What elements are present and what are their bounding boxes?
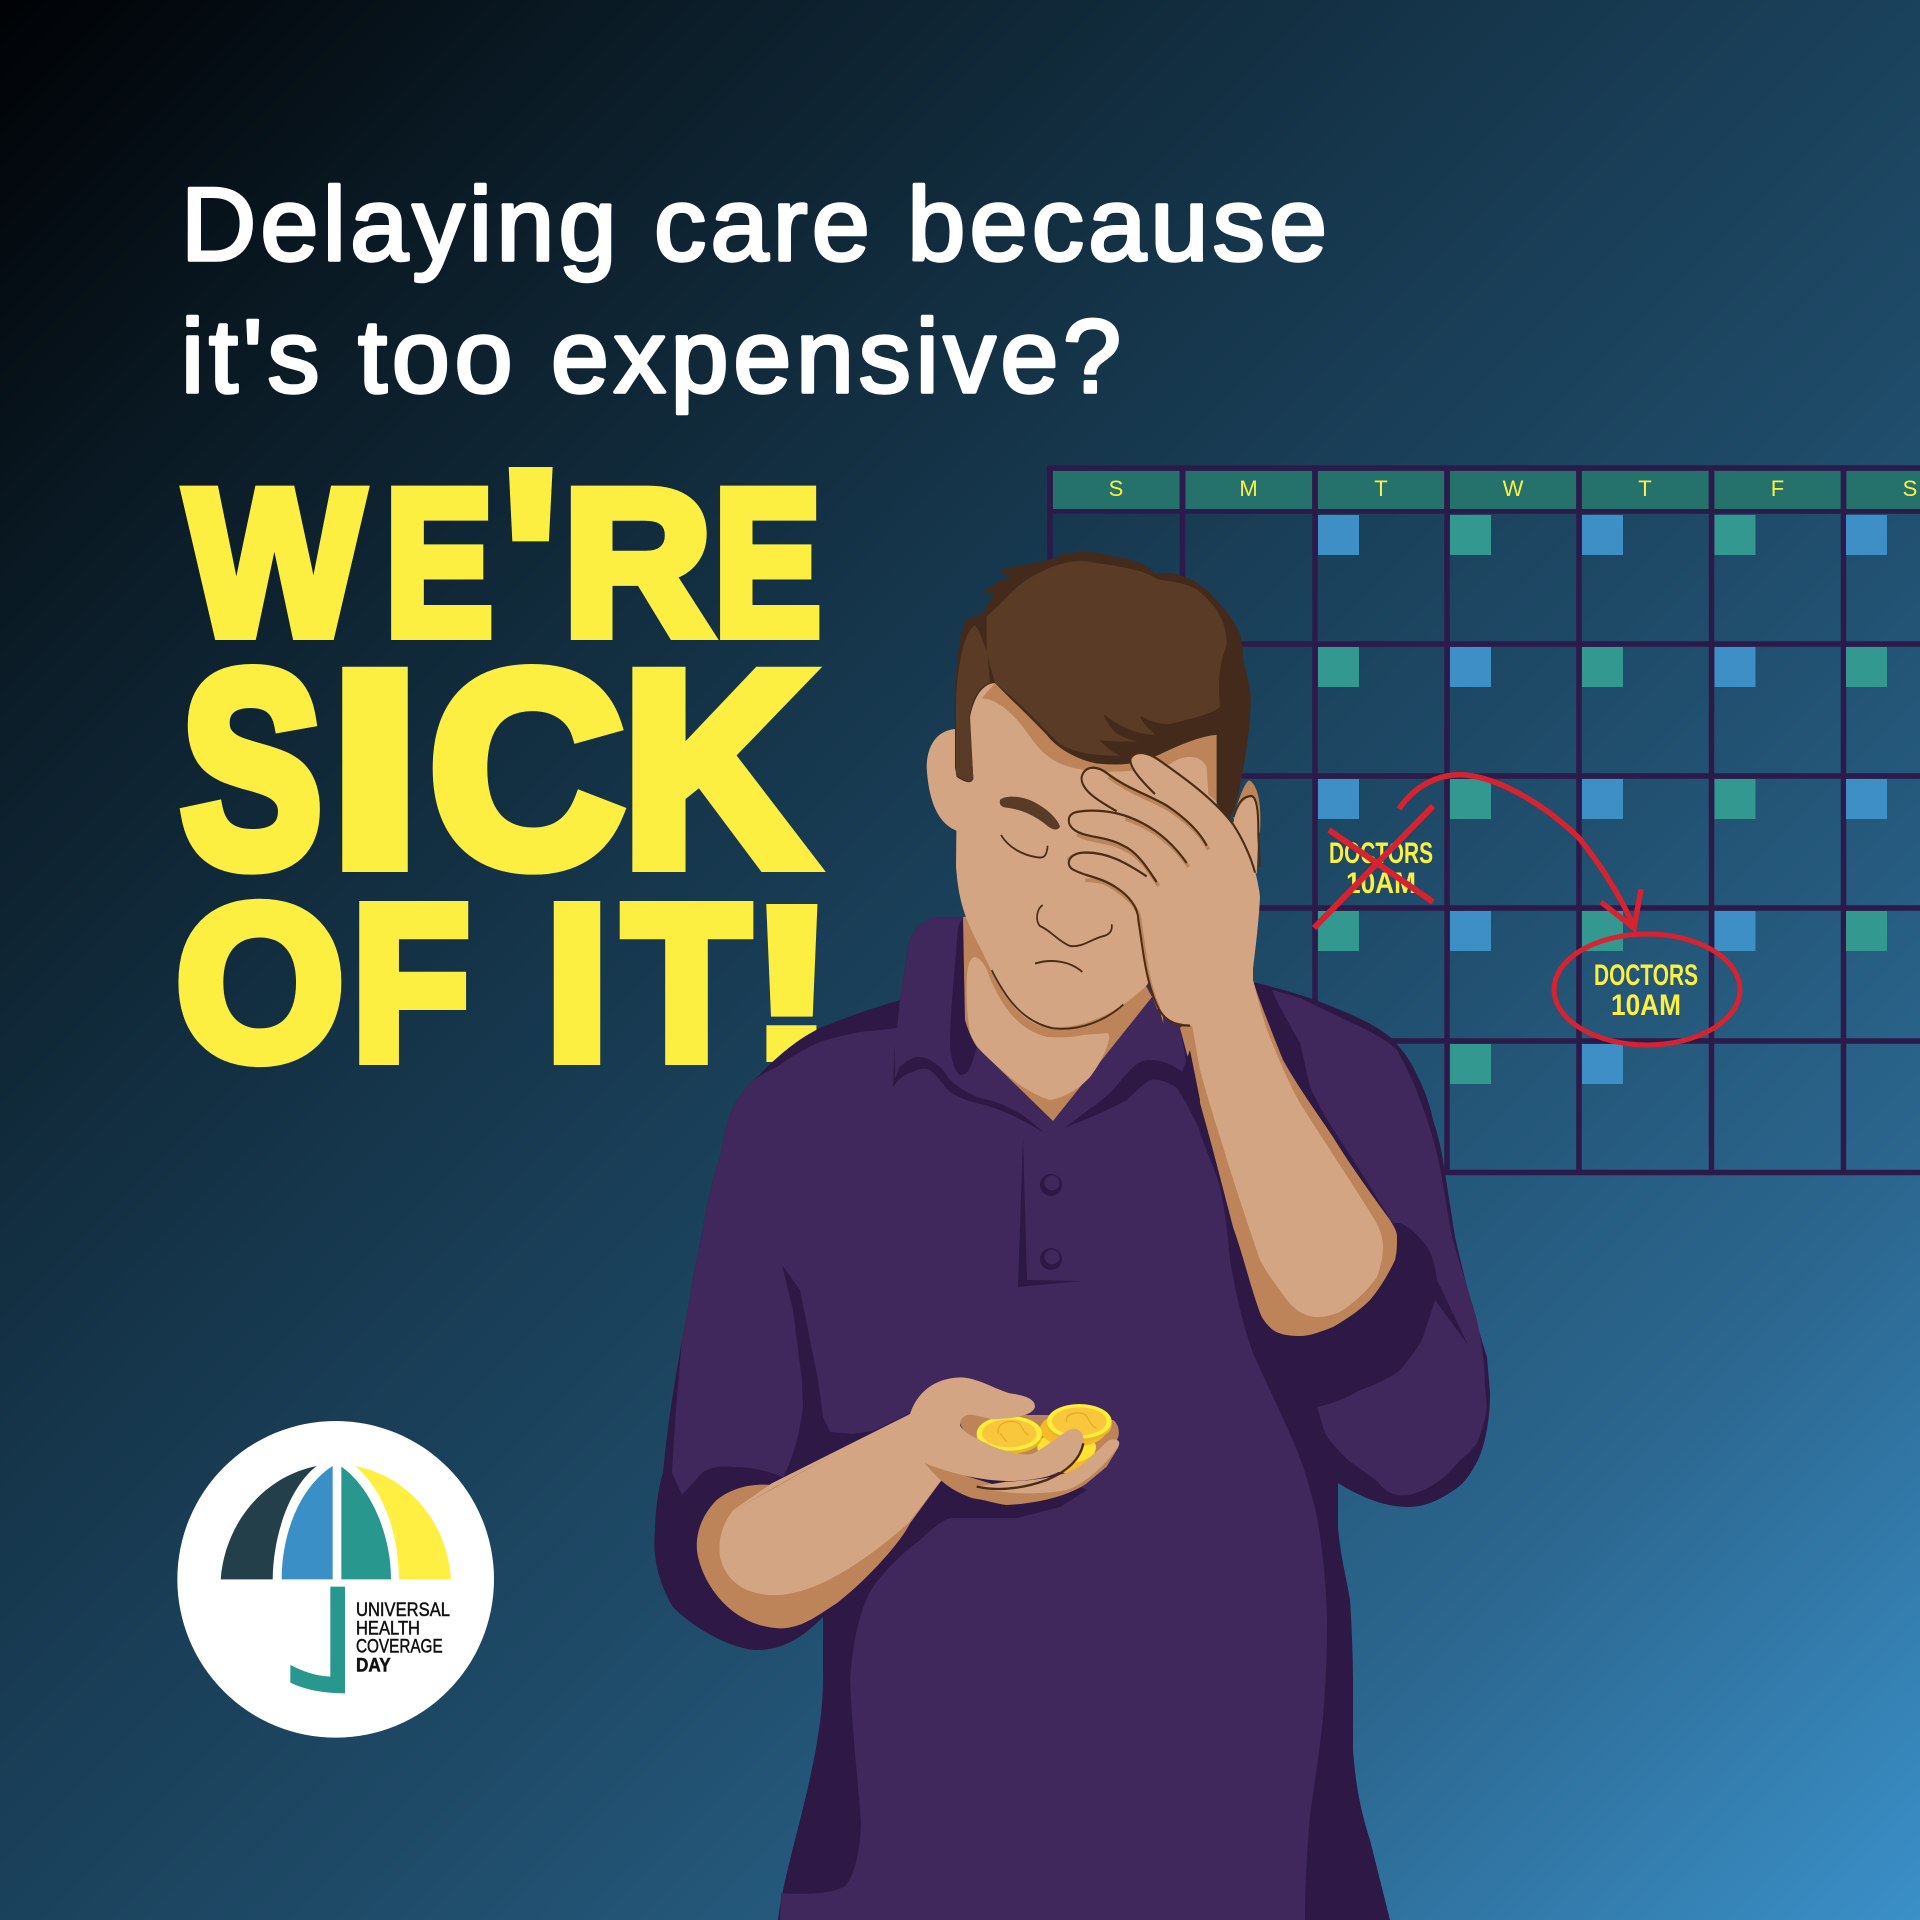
coins <box>977 1404 1112 1473</box>
slogan: we're sick of it: ' <box>502 419 559 698</box>
weekday letters: M <box>1239 476 1258 501</box>
umbrella handle <box>290 1587 345 1693</box>
logo: universal health coverage day <box>177 1421 494 1738</box>
calendar grid <box>1047 468 1920 1172</box>
hand on forehead <box>1067 753 1260 1028</box>
forehead shadow <box>982 683 1217 802</box>
logo wordmark: HEALTH <box>356 1618 420 1639</box>
cancelled appointment note <box>1329 837 1433 900</box>
slogan: we're sick of it: R <box>563 447 712 678</box>
head <box>927 552 1260 1029</box>
calendar day headers <box>1053 471 1920 509</box>
collar <box>893 1043 1200 1132</box>
slogan: we're sick of it: E <box>714 447 821 678</box>
weekday letters: W <box>1503 476 1524 501</box>
slogan: we're sick of it: I <box>330 616 420 923</box>
shirt silhouette <box>654 917 1490 1920</box>
left ear <box>927 729 962 832</box>
slogan: we're sick of it: C <box>430 616 624 923</box>
logo disc <box>177 1421 494 1738</box>
neck <box>950 900 1152 1121</box>
heading: delaying care: it's too expensive? <box>181 299 1121 415</box>
red reschedule arrow <box>1399 775 1641 928</box>
weekday letters: F <box>1771 476 1784 501</box>
eyebrow <box>1000 797 1060 829</box>
weekday letters: T <box>1638 476 1652 501</box>
blue day markers <box>1318 515 1887 1084</box>
logo wordmark: COVERAGE <box>356 1637 443 1658</box>
slogan: we're sick of it: I <box>546 862 608 1105</box>
new appointment note: 10AM <box>1611 989 1681 1022</box>
teal day markers <box>1318 515 1887 1084</box>
weekday letters: S <box>1109 476 1123 501</box>
slogan: we're sick of it: S <box>181 616 322 923</box>
weekday letters <box>1109 476 1917 501</box>
logo wordmark <box>356 1600 450 1677</box>
weekday letters: S <box>1903 476 1917 501</box>
heading: delaying care <box>181 167 1327 415</box>
lowered arm and hand with coins <box>697 1377 1119 1628</box>
red cross <box>1314 806 1433 928</box>
calendar <box>1047 468 1920 1172</box>
new appointment note: DOCTORS <box>1594 959 1698 992</box>
slogan: we're sick of it: F <box>353 862 469 1105</box>
placket and buttons <box>1018 1137 1080 1287</box>
slogan: we're sick of it: K <box>622 616 812 923</box>
raised arm <box>1180 960 1397 1336</box>
closed eye, nose and mouth lines <box>992 835 1123 1029</box>
right ear <box>1233 781 1260 874</box>
slogan: we're sick of it: E <box>385 447 493 678</box>
red circle <box>1554 934 1740 1045</box>
weekday letters: T <box>1374 476 1388 501</box>
slogan: we're sick of it: O <box>176 862 344 1105</box>
shirt front <box>672 917 1327 1920</box>
slogan: we're sick of it: W <box>186 447 364 678</box>
new appointment note <box>1594 959 1698 1022</box>
hair <box>955 552 1251 821</box>
cancelled appointment note: 10AM <box>1346 867 1416 900</box>
cancelled appointment note: DOCTORS <box>1329 837 1433 870</box>
slogan: we're sick of it: ! <box>745 862 839 1105</box>
face <box>956 645 1217 1027</box>
umbrella canopy <box>221 1466 451 1579</box>
slogan: we're sick of it <box>176 419 839 1105</box>
person <box>654 552 1490 1920</box>
logo wordmark: UNIVERSAL <box>356 1600 450 1621</box>
slogan: we're sick of it: T <box>624 862 749 1105</box>
heading: delaying care: Delaying care because <box>181 167 1327 283</box>
right sleeve <box>1272 990 1487 1495</box>
logo wordmark: DAY <box>356 1656 391 1677</box>
